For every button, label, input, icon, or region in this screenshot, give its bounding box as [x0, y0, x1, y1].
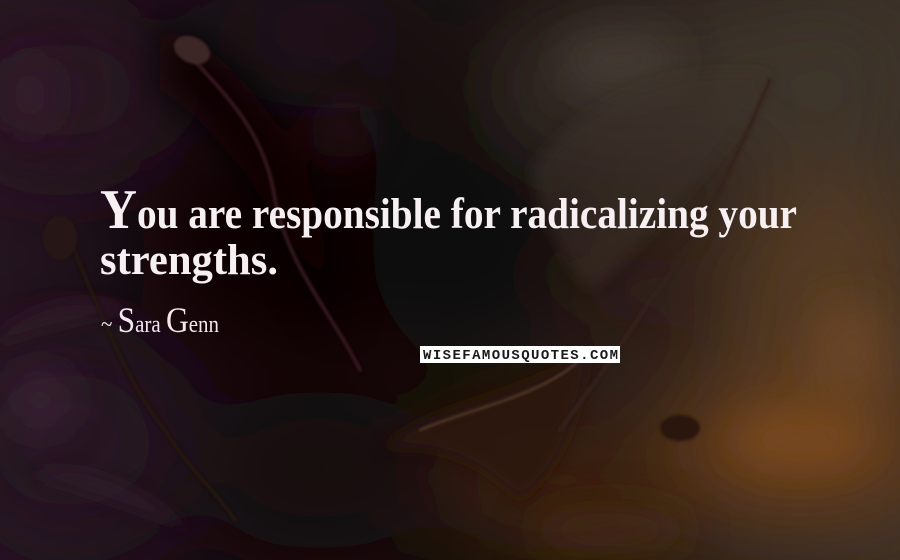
- watermark: wisefamousquotes.com: WISEFAMOUSQUOTES.COM: [423, 348, 618, 364]
- author attribution: ~ Sara Genn: [101, 300, 219, 340]
- quote text: strengths.: [100, 237, 278, 284]
- quote text: You are responsible for radicalizing your: [100, 179, 797, 241]
- quote text: [100, 179, 797, 284]
